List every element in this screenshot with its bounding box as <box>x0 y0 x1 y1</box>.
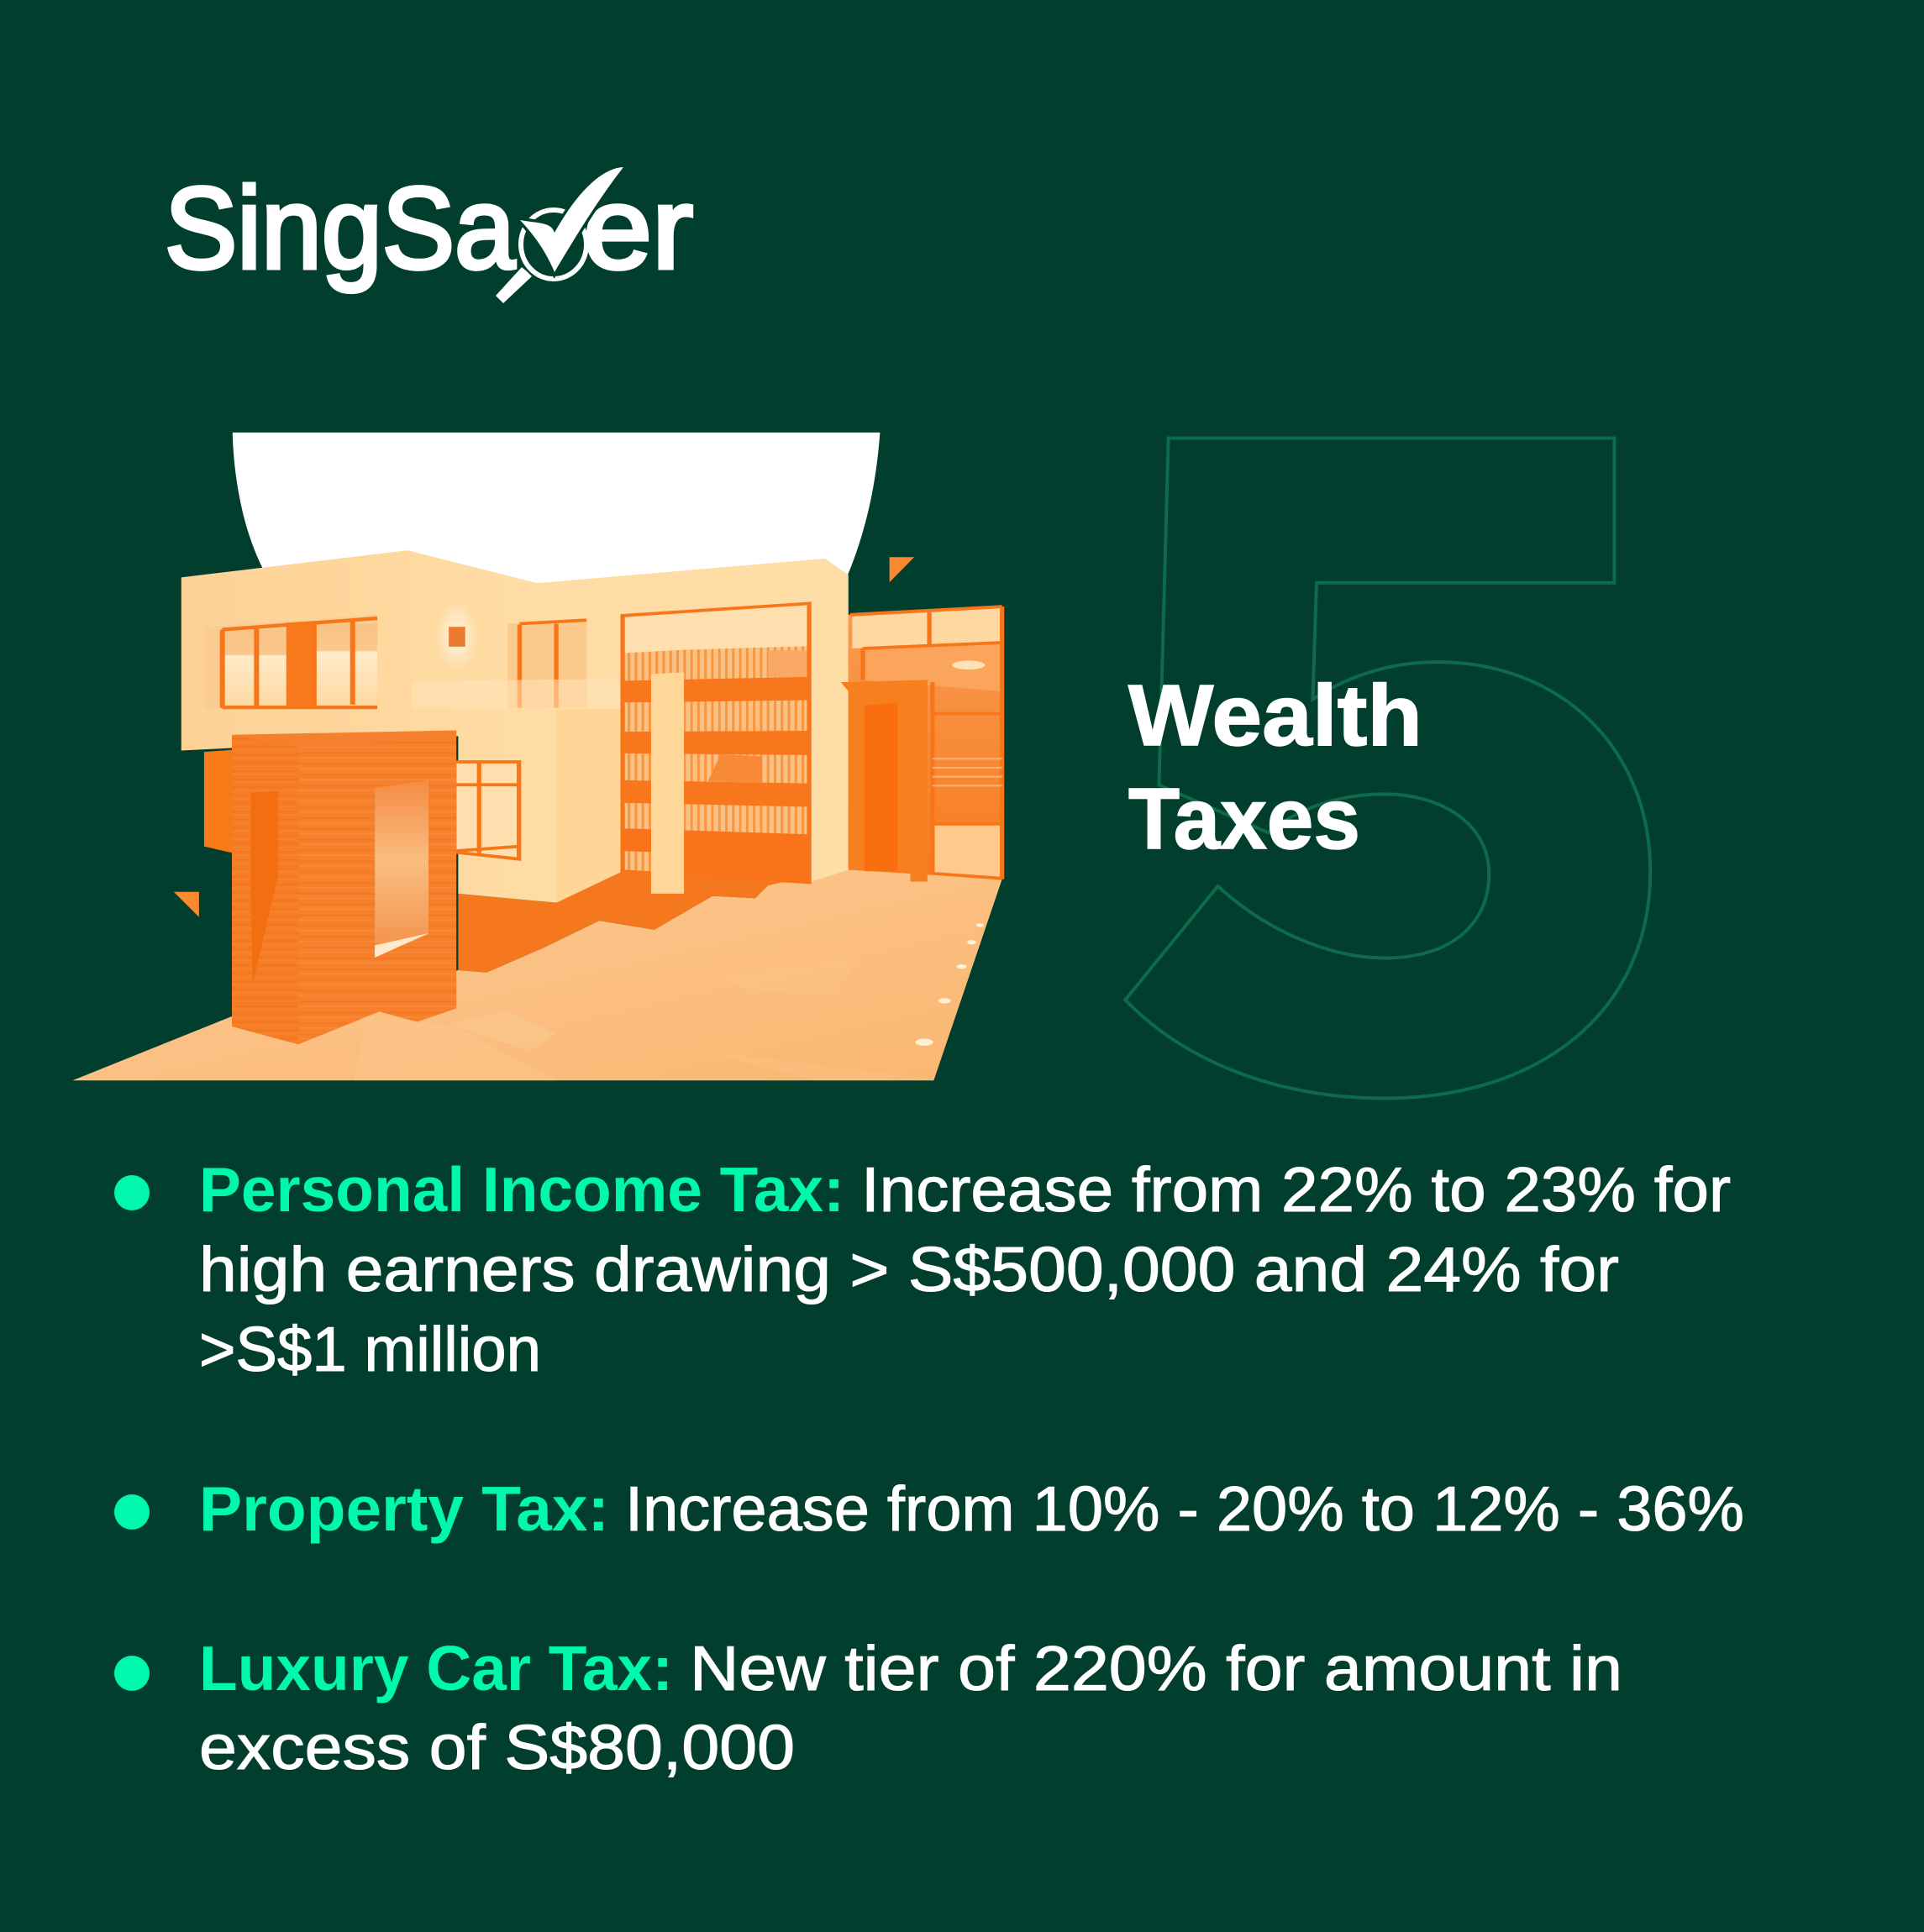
bullet dot <box>114 1656 150 1691</box>
property tax text: Increase from 10% - 20% to 12% - 36% <box>625 1473 1744 1544</box>
personal income tax text: Increase from 22% to 23% for <box>861 1154 1731 1225</box>
lower window <box>456 762 519 859</box>
personal income tax text: high earners drawing > S$500,000 and 24% for <box>199 1234 1619 1305</box>
luxury car tax text: excess of S$80,000 <box>199 1712 795 1782</box>
house walls <box>181 550 849 903</box>
luxury car tax text: Luxury Car Tax: <box>199 1633 673 1704</box>
bullet dot <box>114 1175 150 1210</box>
personal income tax text <box>199 1154 1731 1384</box>
orange triangle top right <box>890 557 914 582</box>
glass balustrade <box>412 679 619 709</box>
dark garden bed <box>458 867 809 973</box>
low dark wall <box>204 749 234 853</box>
icon: magnifier and check mark <box>496 167 623 303</box>
luxury car tax text <box>199 1633 1622 1782</box>
ground lights <box>916 923 984 1046</box>
logo wordmark: SingSa <box>165 164 515 293</box>
bullet dot <box>114 1494 150 1530</box>
heading: Wealth Taxes: Wealth <box>1128 667 1422 764</box>
logo: SingSaver <box>165 164 693 303</box>
wall lamp with glow <box>435 601 478 671</box>
glass annex <box>849 606 1002 879</box>
foreground wood wall <box>232 730 456 1044</box>
bullet: personal income tax <box>114 1154 1731 1384</box>
house illustration <box>72 433 1002 1080</box>
heading: Wealth Taxes: Taxes <box>1128 770 1360 867</box>
heading: Wealth Taxes <box>1128 667 1422 867</box>
bullet: property tax <box>114 1473 1744 1544</box>
paved ground <box>72 867 1002 1080</box>
luxury car tax text: New tier of 220% for amount in <box>690 1633 1622 1704</box>
white sun semicircle <box>233 433 880 592</box>
property tax text: Property Tax: <box>199 1473 609 1544</box>
orange triangle bottom left <box>174 892 199 917</box>
side door frame <box>841 680 928 881</box>
entrance glazing <box>623 603 809 883</box>
personal income tax text: Personal Income Tax: <box>199 1154 844 1225</box>
shaded side wall <box>556 709 623 903</box>
balcony window <box>507 618 586 708</box>
big outlined number 5 <box>1125 438 1650 1098</box>
entrance pillar <box>651 672 684 894</box>
logo wordmark: er <box>583 164 693 293</box>
upper left window <box>204 615 377 709</box>
bullet: luxury car tax <box>114 1633 1622 1782</box>
personal income tax text: >S$1 million <box>199 1314 541 1384</box>
